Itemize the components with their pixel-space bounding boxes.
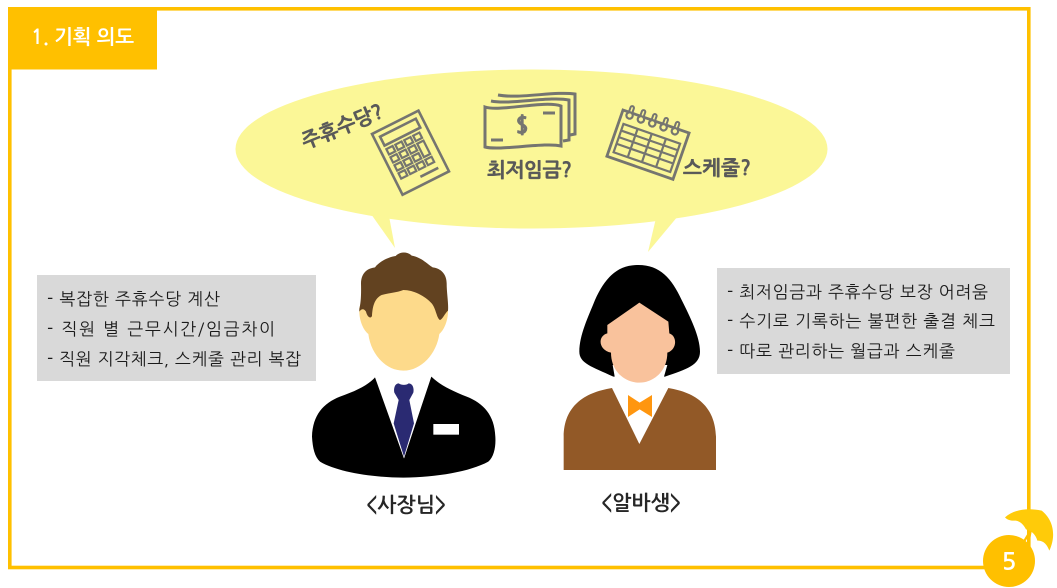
- face: [359, 290, 448, 371]
- label: 주휴수당: 주휴수당?: [298, 100, 386, 152]
- page number badge: 5: [1002, 550, 1016, 574]
- neck and collar: [612, 365, 668, 443]
- caption: owner: <사장님>: [366, 494, 446, 516]
- bow tie: [628, 395, 652, 417]
- label: 스케줄: 스케줄?: [683, 158, 751, 178]
- panel: owner concerns: - 직원 별 근무시간/임금차이: [47, 320, 275, 338]
- panel: owner concerns: - 직원 지각체크, 스케줄 관리 복잡: [47, 350, 301, 368]
- icon: part-timer figure: [564, 265, 716, 470]
- hair: [579, 265, 700, 377]
- hair: [359, 252, 448, 320]
- panel: part-timer concerns: - 최저임금과 주휴수당 보장 어려움: [727, 283, 988, 301]
- icon: umbrella: [1005, 509, 1053, 551]
- label: 최저임금: 최저임금?: [487, 160, 572, 180]
- tie: [394, 383, 414, 457]
- icon: banknotes: $: [515, 113, 529, 137]
- section heading tab: 1. 기획 의도: [31, 27, 134, 47]
- shirt: [377, 377, 429, 458]
- page number badge: [983, 535, 1035, 587]
- section heading tab: [8, 7, 157, 70]
- icon: calendar: [607, 105, 691, 179]
- panel: part-timer concerns: - 수기로 기록하는 불편한 출결 체크: [727, 312, 995, 330]
- icon: banknotes: [485, 93, 575, 148]
- caption: part-timer: <알바생>: [601, 492, 681, 514]
- face and ears: [601, 303, 675, 383]
- panel: part-timer concerns: [717, 268, 1010, 374]
- panel: owner concerns: - 복잡한 주휴수당 계산: [47, 290, 220, 308]
- vest: [564, 388, 716, 470]
- suit: [312, 377, 495, 478]
- icon: owner figure: [312, 252, 495, 478]
- speech bubble: [236, 70, 828, 252]
- name badge: [433, 424, 459, 435]
- panel: owner concerns: [37, 275, 316, 381]
- panel: part-timer concerns: - 따로 관리하는 월급과 스케줄: [727, 342, 955, 360]
- icon: calculator: [372, 111, 449, 195]
